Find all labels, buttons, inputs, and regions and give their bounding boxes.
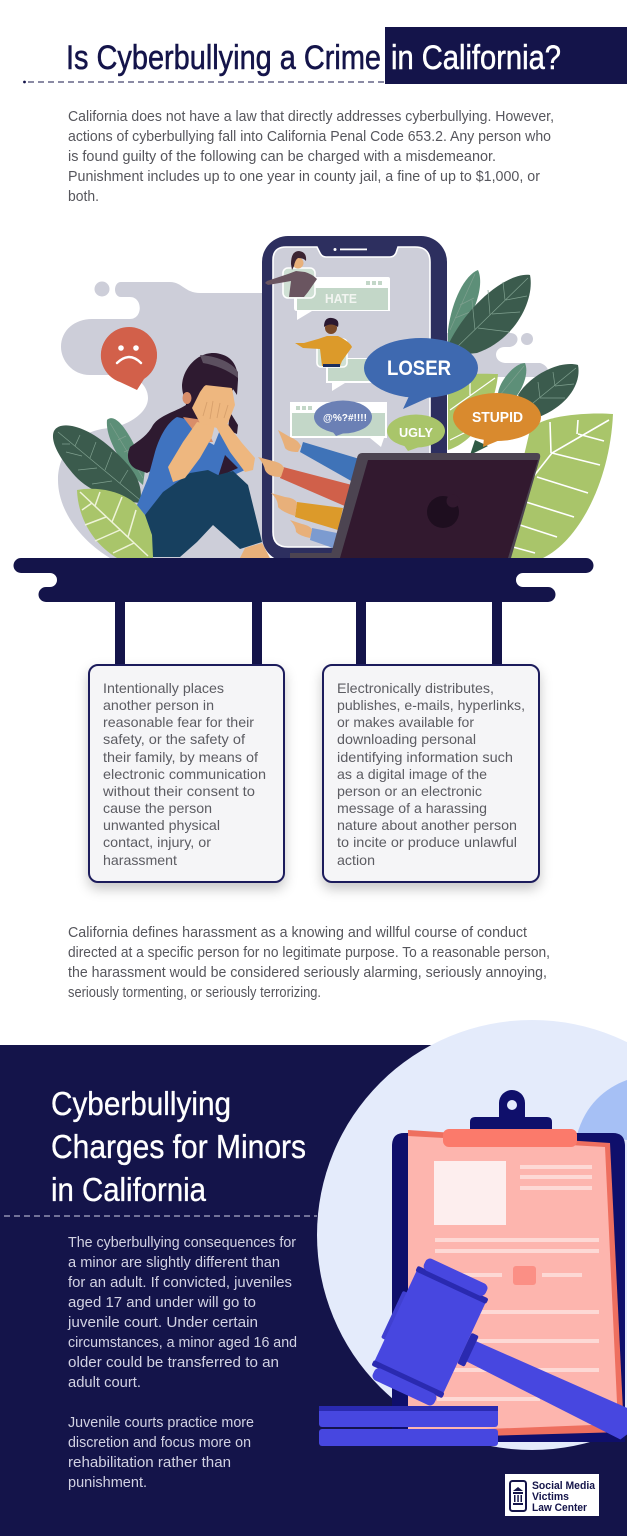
panel: electronic threats: Intentionally places xyxy=(103,680,224,696)
chat bubble: second xyxy=(326,358,372,391)
panel: electronic distribution: person or an electronic xyxy=(337,783,482,799)
harassment definition text: seriously tormenting, or seriously terrorizing. xyxy=(68,985,321,1001)
panel: electronic threats: contact, injury, or xyxy=(103,834,211,850)
background dot right xyxy=(521,333,533,345)
illustration: cyberbullying scene xyxy=(14,236,613,602)
panel: electronic distribution xyxy=(323,665,539,882)
panel: electronic threats: harassment xyxy=(103,852,177,868)
harassment definition text: the harassment would be considered seriously alarming, seriously annoying, xyxy=(68,965,547,981)
title: in California? xyxy=(391,39,561,77)
section heading: Cyberbullying xyxy=(51,1085,231,1122)
section heading: Charges for Minors xyxy=(51,1128,306,1165)
section body text: a minor are slightly different than xyxy=(68,1255,280,1271)
left leaves xyxy=(53,418,153,558)
phone xyxy=(262,236,447,562)
speech bubble: stupid: STUPID xyxy=(472,409,523,426)
section body text: for an adult. If convicted, juveniles xyxy=(68,1275,292,1291)
background dot left xyxy=(94,282,110,296)
title xyxy=(23,27,627,84)
section body text: The cyberbullying consequences for xyxy=(68,1235,296,1251)
harassment definition text: California defines harassment as a knowing and willful course of conduct xyxy=(68,925,527,941)
light circle xyxy=(317,1020,627,1450)
logo: Victims xyxy=(532,1491,569,1503)
sad face bubble xyxy=(101,327,157,390)
panel: electronic distribution: publishes, e-mails, hyperlinks, xyxy=(337,697,525,713)
speech bubble: loser: LOSER xyxy=(387,357,451,380)
background blob right xyxy=(447,333,548,377)
laptop xyxy=(330,453,540,558)
avatar: man pointing xyxy=(295,318,352,367)
harassment definition text xyxy=(68,925,550,1001)
panel: electronic threats: without their consent to xyxy=(102,783,255,799)
panel: electronic distribution: downloading personal xyxy=(337,731,476,747)
section body text: discretion and focus more on xyxy=(68,1435,251,1451)
avatar: woman pointing xyxy=(265,251,317,298)
intro text: actions of cyberbullying fall into California Penal Code 653.2. Any person who xyxy=(68,129,551,145)
panel: electronic distribution: to incite or produce unlawful xyxy=(337,834,517,850)
panel: electronic threats: another person in xyxy=(103,697,214,713)
section heading: in California xyxy=(51,1171,207,1208)
chat bubble: hate: HATE xyxy=(325,291,357,306)
title: Is Cyberbullying a Crime xyxy=(66,39,381,77)
panel: electronic threats: reasonable fear for their xyxy=(103,714,254,730)
gavel xyxy=(319,1254,627,1492)
panel: minors section xyxy=(0,1020,627,1536)
panel: electronic distribution: action xyxy=(337,852,375,868)
speech bubble: ugly: UGLY xyxy=(399,425,433,440)
speech bubble: ugly xyxy=(387,414,445,451)
panel: electronic distribution: nature about another person xyxy=(337,817,517,833)
harassment definition text: directed at a specific person for no legitimate purpose. To a reasonable person, xyxy=(68,945,550,961)
clipboard xyxy=(392,1090,625,1442)
background blob left xyxy=(58,282,265,558)
section body text: juvenile court. Under certain xyxy=(67,1315,258,1331)
panel: electronic threats: safety, or the safety of xyxy=(103,731,245,747)
panel: electronic distribution: Electronically distributes, xyxy=(337,680,494,696)
woman crying xyxy=(128,353,270,558)
section heading xyxy=(4,1085,317,1216)
hanging posts xyxy=(115,592,502,666)
section body text: adult court. xyxy=(68,1375,141,1391)
section body text xyxy=(67,1235,297,1491)
section body text: rehabilitation rather than xyxy=(68,1455,231,1471)
chat bubble: hate xyxy=(294,277,390,320)
section body text: older could be transferred to an xyxy=(68,1355,279,1371)
logo: Social Media xyxy=(532,1480,596,1492)
intro text: California does not have a law that directly addresses cyberbullying. However, xyxy=(68,109,554,125)
section body text: aged 17 and under will go to xyxy=(68,1295,256,1311)
intro text: both. xyxy=(68,189,99,205)
panel: electronic distribution: as a digital image of the xyxy=(337,766,487,782)
section body text: circumstances, a minor aged 16 and xyxy=(68,1335,297,1351)
panel: electronic distribution: or makes available for xyxy=(337,714,474,730)
speech bubble: swearing xyxy=(314,400,372,436)
intro text: Punishment includes up to one year in county jail, a fine of up to $1,000, or xyxy=(68,169,540,185)
speech bubble: stupid xyxy=(453,393,541,455)
right leaves xyxy=(448,270,613,558)
logo xyxy=(505,1474,599,1516)
panel: electronic threats: electronic communication xyxy=(103,766,266,782)
panel: electronic distribution: message of a harassing xyxy=(337,800,487,816)
panel: electronic threats: cause the person xyxy=(103,800,212,816)
speech bubble: swearing: @%?#!!!! xyxy=(323,412,367,424)
pointing arms xyxy=(258,430,363,548)
panel: electronic threats xyxy=(89,665,284,882)
section body text: Juvenile courts practice more xyxy=(68,1415,254,1431)
shelf xyxy=(14,558,594,602)
panel: electronic threats: their family, by means of xyxy=(103,749,258,765)
intro text: is found guilty of the following can be charged with a misdemeanor. xyxy=(68,149,496,165)
accent shape xyxy=(577,1080,627,1140)
logo: Law Center xyxy=(532,1502,588,1514)
chat bubble: third xyxy=(290,402,387,447)
speech bubble: loser xyxy=(364,338,478,409)
section background xyxy=(0,1045,627,1536)
panel: electronic threats: unwanted physical xyxy=(103,817,220,833)
intro text xyxy=(68,109,554,205)
section body text: punishment. xyxy=(68,1475,147,1491)
panel: electronic distribution: identifying information such xyxy=(337,749,513,765)
